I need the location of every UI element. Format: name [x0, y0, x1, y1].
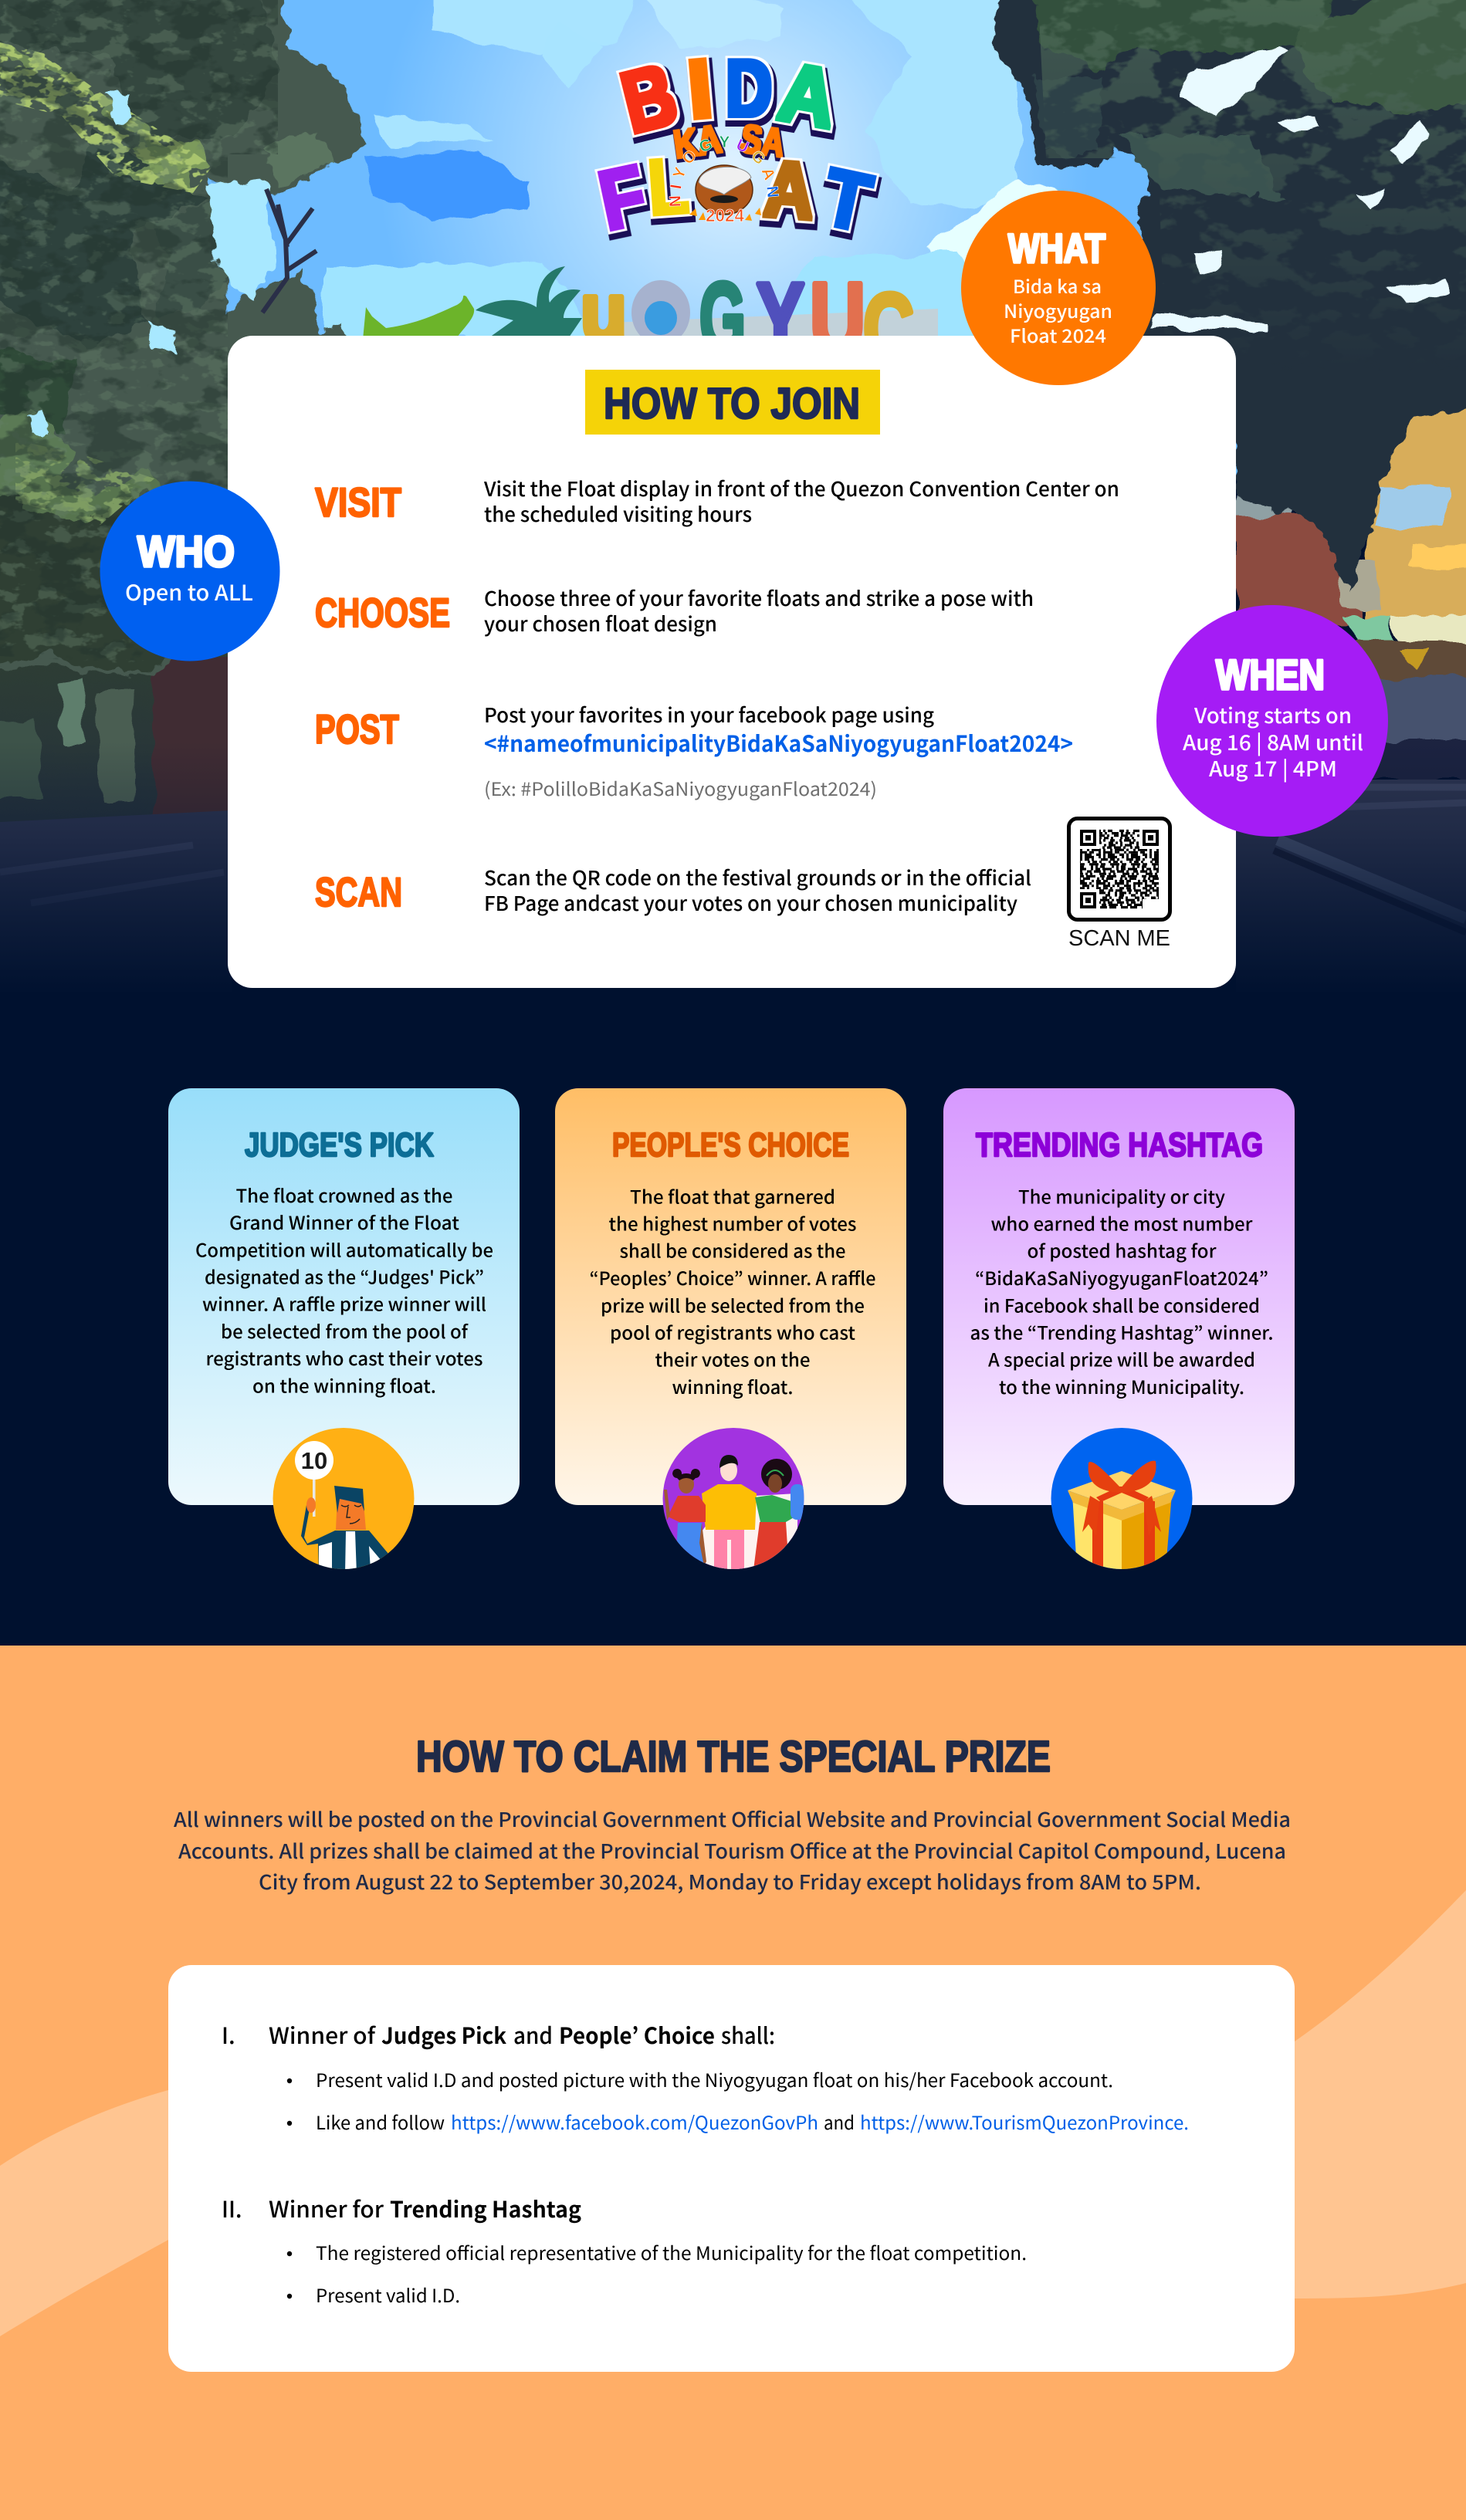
badge: when: Aug 16 | 8AM until	[1183, 726, 1363, 756]
score sign: 10	[301, 1447, 327, 1474]
requirement I heading: Judges Pick	[381, 2018, 506, 2051]
step: scan: FB Page andcast your votes on your chosen municipality	[484, 888, 1017, 917]
page background navy	[0, 0, 1466, 1652]
logo coconut emblem	[669, 136, 780, 225]
box	[1068, 1471, 1176, 1570]
requirement I bullets: https://www.TourismQuezonProvince.	[860, 2108, 1189, 2135]
description: trending hashtag	[970, 1182, 1274, 1399]
requirement I bullets: and	[824, 2108, 855, 2135]
man	[702, 1455, 757, 1571]
heading: how to join	[585, 370, 880, 435]
requirement II bullets: Present valid I.D.	[316, 2281, 460, 2308]
logo: Bida ka sa Float	[591, 41, 879, 249]
panel: requirements card	[168, 1965, 1295, 2372]
description: people's choice: shall be considered as the	[619, 1237, 846, 1263]
requirement I bullets: Present valid I.D and posted picture with the Niyogyugan float on his/her Facebook account.	[316, 2065, 1113, 2092]
badge: what: Niyogyugan	[1004, 296, 1112, 323]
requirement I heading: shall:	[721, 2018, 775, 2051]
logo KA SA letters: KA	[671, 117, 724, 167]
icon: judge holding score sign	[273, 1428, 415, 1575]
left street buildings	[0, 617, 247, 830]
road	[0, 780, 1466, 992]
description: judge's pick: The float crowned as the	[236, 1182, 452, 1208]
requirement I heading	[222, 2018, 775, 2051]
panel: judge's pick	[168, 1088, 520, 1505]
badge: when	[1156, 605, 1388, 837]
right tree texture	[1038, 0, 1466, 370]
header street scene illustration	[0, 0, 1466, 996]
step: post: <#nameofmunicipalityBidaKaSaNiyogyuganFloat2024>	[484, 726, 1073, 759]
badge: what	[961, 191, 1156, 385]
decorative wave band	[0, 1890, 1466, 2336]
sky	[0, 0, 1466, 479]
description: people's choice: prize will be selected from the	[601, 1291, 865, 1318]
requirement I heading: People’ Choice	[559, 2018, 715, 2051]
logo BIDA letters: D	[726, 44, 772, 134]
left tree	[0, 0, 367, 679]
description: trending hashtag: as the “Trending Hashtag” winner.	[970, 1318, 1274, 1345]
letters: G	[699, 263, 746, 374]
logo FLOAT letters: T	[816, 152, 879, 249]
road streaks	[0, 787, 1466, 903]
badge: what: Bida ka sa	[1013, 272, 1102, 299]
woman left	[664, 1469, 706, 1570]
description: people's choice: “Peoples’ Choice” winner. A raffle	[590, 1264, 875, 1290]
letters: Y	[757, 263, 804, 374]
description: trending hashtag: “BidaKaSaNiyogyuganFloat2024”	[975, 1264, 1268, 1290]
scan me label: SCAN ME	[1068, 926, 1170, 951]
grey structure behind letters	[610, 309, 938, 340]
step: scan: SCAN	[315, 870, 402, 915]
logo BIDA letters	[613, 41, 843, 151]
requirement II heading: Trending Hashtag	[390, 2192, 581, 2224]
description: judge's pick: designated as the “Judges' Pick”	[205, 1263, 484, 1289]
description: judge's pick: Competition will automatically be	[195, 1236, 493, 1263]
step: scan: Scan the QR code on the festival grounds or in the official	[484, 863, 1031, 891]
description: people's choice: The float that garnered	[630, 1182, 835, 1209]
sign stick	[313, 1478, 315, 1517]
heading: how to join: HOW TO JOIN	[604, 379, 860, 428]
left tree foliage texture	[0, 0, 278, 664]
description: trending hashtag: A special prize will be awarded	[988, 1346, 1255, 1372]
description: trending hashtag: in Facebook shall be considered	[984, 1291, 1260, 1318]
banner	[710, 195, 738, 203]
description: judge's pick	[195, 1182, 493, 1399]
figure	[301, 1486, 388, 1575]
logo BIDA letters: I	[683, 41, 717, 136]
step: post	[315, 700, 1073, 801]
description: judge's pick: registrants who cast their votes	[205, 1345, 483, 1371]
badge: what: WHAT	[1008, 226, 1105, 272]
badge: when: Aug 17 | 4PM	[1209, 753, 1337, 783]
step: visit: Visit the Float display in front of the Quezon Convention Center on	[483, 474, 1119, 502]
text block: claim instructions	[174, 1805, 1291, 1896]
year 2024: 2024	[706, 205, 744, 225]
fade to navy	[0, 741, 1466, 996]
QR code	[1068, 818, 1170, 920]
step: visit: the scheduled visiting hours	[484, 499, 752, 528]
badge: when: Voting starts on	[1193, 699, 1352, 729]
score sign	[295, 1441, 333, 1480]
coconut white top	[699, 167, 751, 194]
step: post: (Ex: #PolilloBidaKaSaNiyogyuganFloat2024)	[484, 774, 877, 801]
bunting	[689, 208, 761, 221]
red building	[1236, 517, 1366, 625]
panel: how to join card	[228, 336, 1236, 988]
badge: what: Float 2024	[1010, 321, 1106, 348]
step: choose: Choose three of your favorite floats and strike a pose with	[484, 583, 1034, 612]
description: judge's pick: winner. A raffle prize winner will	[202, 1290, 486, 1317]
heading: trending hashtag: TRENDING HASHTAG	[976, 1126, 1263, 1164]
letters: C	[863, 274, 914, 384]
logo KA SA letters: SA	[739, 117, 787, 166]
fence	[1374, 679, 1466, 741]
right tree highlights	[1150, 48, 1451, 330]
green creature	[363, 296, 474, 340]
description: people's choice: the highest number of votes	[608, 1210, 857, 1236]
right buildings	[1236, 397, 1466, 780]
description: judge's pick: on the winning float.	[252, 1372, 436, 1399]
yellow building	[1366, 397, 1466, 617]
description: judge's pick: Grand Winner of the Float	[229, 1209, 459, 1235]
text block: claim instructions: All winners will be posted on the Provincial Government Official Website and Provincial Government Social Media	[174, 1805, 1291, 1833]
coconut	[696, 165, 753, 215]
description: trending hashtag: who earned the most number	[991, 1210, 1253, 1236]
description: trending hashtag: of posted hashtag for	[1027, 1237, 1217, 1263]
badge: who	[100, 482, 279, 661]
heading: how to claim the special prize: HOW TO CLAIM THE SPECIAL PRIZE	[416, 1732, 1051, 1781]
description: trending hashtag: to the winning Municipality.	[999, 1373, 1244, 1399]
requirement I bullets: https://www.facebook.com/QuezonGovPh	[451, 2108, 818, 2135]
bow	[1082, 1461, 1161, 1536]
woman right	[753, 1459, 795, 1570]
logo FLOAT letters: L	[646, 142, 690, 232]
description: people's choice: their votes on the	[655, 1346, 811, 1372]
section background: claim the prize	[0, 1646, 1466, 2520]
palm	[476, 266, 582, 340]
description: people's choice: pool of registrants who cast	[610, 1318, 855, 1345]
step: scan	[315, 863, 1031, 917]
description: judge's pick: be selected from the pool of	[221, 1318, 469, 1344]
person at right edge	[791, 1484, 804, 1520]
logo KA SA letters	[671, 117, 787, 167]
badge: when: WHEN	[1216, 651, 1325, 698]
step: choose	[315, 583, 1034, 638]
requirement I bullets: Like and follow	[316, 2108, 445, 2135]
requirement I heading: Winner of	[269, 2018, 376, 2051]
step: visit: VISIT	[315, 480, 401, 526]
right tree	[992, 0, 1466, 594]
description: people's choice: winning float.	[672, 1373, 794, 1399]
requirement II heading	[222, 2192, 581, 2224]
heading: people's choice: PEOPLE'S CHOICE	[612, 1126, 849, 1164]
requirement II heading: Winner for	[269, 2192, 384, 2224]
requirement I heading: and	[513, 2018, 553, 2051]
step: visit	[315, 474, 1119, 528]
branch	[262, 189, 317, 313]
text block: claim instructions: Accounts. All prizes shall be claimed at the Provincial Tourism Office at the Provincial Capitol Compound, Lucena	[178, 1836, 1286, 1865]
logo BIDA letters: A	[773, 44, 843, 146]
step: choose: your chosen float design	[484, 609, 717, 638]
requirement II heading: II.	[222, 2192, 242, 2224]
requirement II bullets	[287, 2238, 1027, 2308]
float letters background	[363, 263, 938, 384]
curb	[1278, 840, 1466, 918]
pale wall	[1339, 560, 1378, 610]
lime highlights in left tree	[0, 42, 212, 525]
step: post: POST	[315, 707, 399, 753]
logo FLOAT letters: A	[761, 144, 817, 237]
white backdrop	[699, 1493, 797, 1570]
requirement I bullets	[287, 2065, 1189, 2135]
text block: claim instructions: City from August 22 to September 30,2024, Monday to Friday except holidays from 8AM to 5PM.	[259, 1867, 1201, 1896]
step: choose: CHOOSE	[315, 590, 450, 636]
letters: u	[581, 267, 627, 357]
left tree dark texture	[0, 0, 278, 664]
letters	[581, 263, 914, 384]
logo BIDA letters: B	[613, 46, 686, 151]
letters: U	[810, 263, 865, 374]
step: post: Post your favorites in your facebook page using	[484, 700, 934, 729]
sky gaps in left tree	[27, 93, 278, 436]
badge: who: Open to ALL	[125, 577, 253, 607]
panel: trending hashtag	[943, 1088, 1295, 1505]
heading: judge's pick: JUDGE'S PICK	[245, 1126, 434, 1164]
logo FLOAT letters: F	[591, 147, 653, 247]
logo FLOAT letters	[591, 142, 879, 249]
description: people's choice	[590, 1182, 875, 1399]
badge: who: WHO	[137, 527, 235, 577]
requirement II bullets: The registered official representative of the Municipality for the float competition.	[316, 2238, 1027, 2265]
icon: gift box	[1051, 1428, 1193, 1570]
description: trending hashtag: The municipality or city	[1018, 1182, 1225, 1209]
panel: people's choice	[555, 1088, 906, 1505]
requirement I heading: I.	[222, 2018, 235, 2051]
festival name arc: NIYOGYUGA N	[669, 136, 780, 207]
awning	[1339, 616, 1397, 641]
icon: group of people	[662, 1428, 804, 1571]
